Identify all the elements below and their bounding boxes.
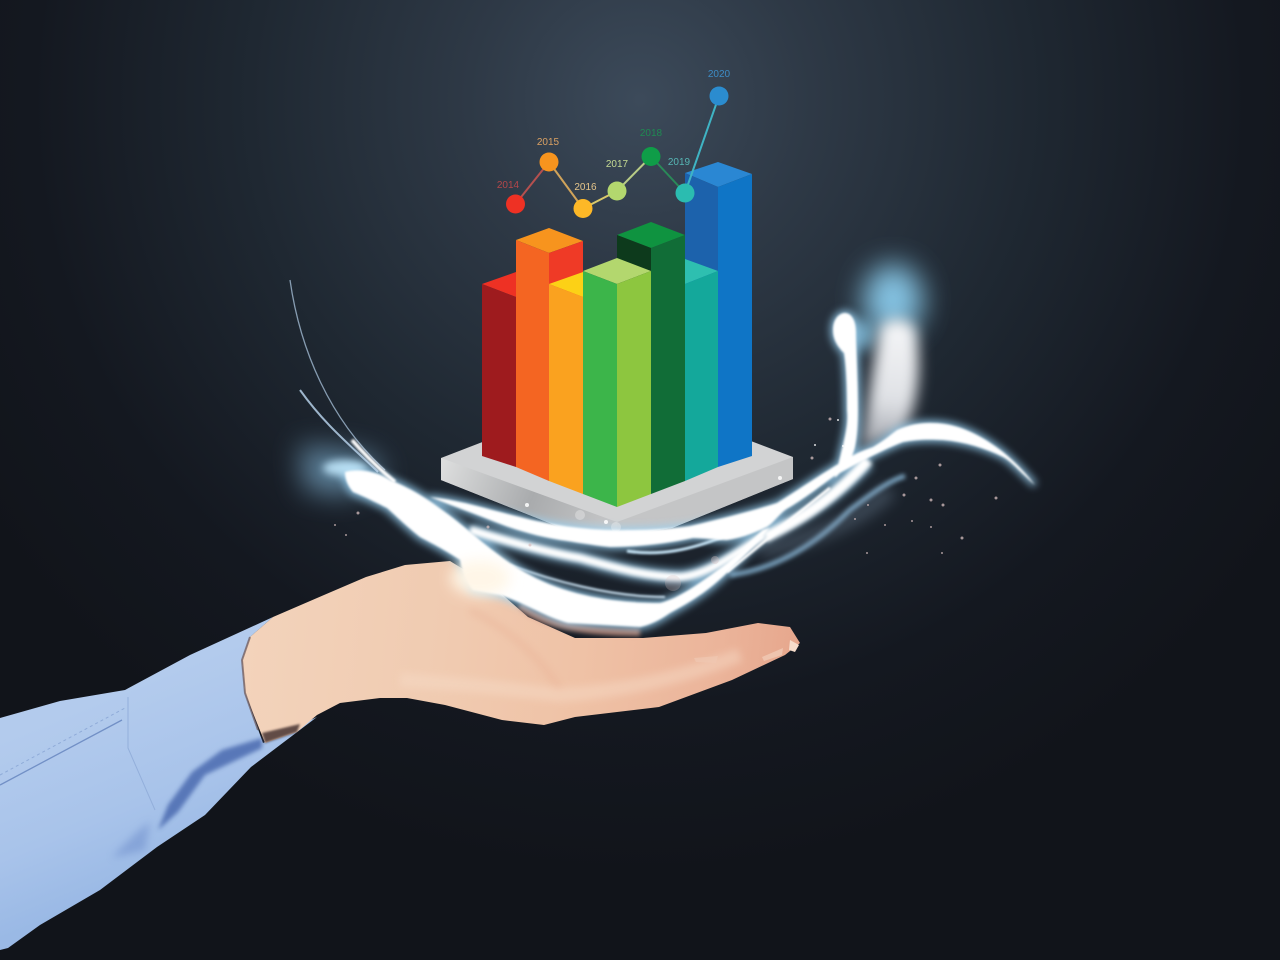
light ribbons sweeping around the chart: [290, 280, 1035, 627]
point 2018: 2018: [640, 128, 663, 139]
connecting lines: [516, 96, 719, 208]
point 2016: 2016: [574, 182, 597, 193]
main white ribbons: [345, 313, 1035, 627]
bar 2020 blue: [685, 162, 752, 467]
chart base platform: [441, 390, 793, 536]
glare on the palm: [450, 560, 510, 596]
point 2017: 2017: [606, 159, 629, 170]
bar 2015 orange: [516, 228, 583, 481]
point 2020: 2020: [708, 69, 731, 80]
blue halo under the ribbons: [345, 313, 1035, 627]
sparkle particles: [334, 418, 998, 591]
point 2014: [497, 180, 525, 214]
point 2018: [640, 128, 663, 166]
point 2014: 2014: [497, 180, 520, 191]
bar 2018 dark green: [617, 222, 685, 494]
soft ghost glow at the right of the ribbon: [850, 264, 923, 450]
bar 2019 teal: [685, 259, 718, 481]
point 2015: 2015: [537, 137, 560, 148]
line chart 2014 to 2020: [497, 69, 731, 218]
bar 2016 amber: [549, 272, 590, 494]
hand and fingers: [242, 561, 800, 743]
middle ribbon: [470, 530, 765, 577]
point 2019: 2019: [668, 157, 691, 168]
secondary blue swooshes: [510, 460, 905, 597]
point 2017: [606, 159, 629, 200]
point 2019: [668, 157, 694, 202]
left end flare: [300, 445, 385, 495]
point 2015: [537, 137, 560, 172]
point 2020: [708, 69, 731, 106]
thin upper left arcs: [290, 280, 395, 482]
arm and open hand: [0, 561, 800, 950]
shirt sleeve: [0, 617, 317, 950]
bar 2014 red: [482, 272, 549, 467]
isometric bar chart: [441, 162, 793, 536]
bar 2017 green: [583, 258, 651, 507]
point 2016: [574, 182, 597, 218]
